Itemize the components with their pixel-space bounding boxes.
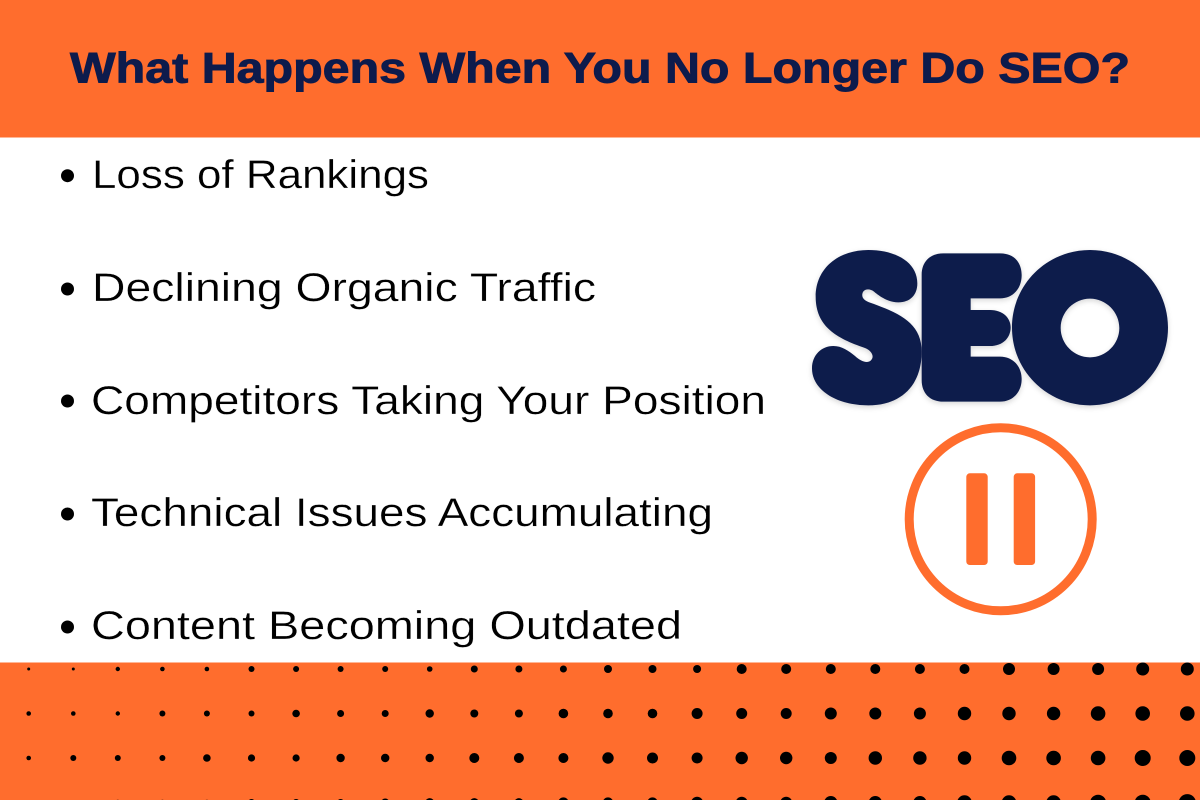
list item: technical issues accumulating: Technical Issues Accumulating (91, 491, 713, 535)
footer band with halftone dots (0, 662, 1200, 800)
header band with title (0, 0, 1200, 138)
list item: content becoming outdated: Content Becoming Outdated (91, 604, 682, 648)
icon: SEO bubble logo (812, 250, 1168, 405)
list item: loss of rankings: Loss of Rankings (92, 153, 429, 197)
list item: declining organic traffic: Declining Organic Traffic (92, 266, 596, 310)
icon: pause button (909, 428, 1092, 611)
list item: competitors taking your position: Competitors Taking Your Position (91, 379, 766, 423)
bullet list (61, 153, 766, 648)
title: What Happens When You No Longer Do SEO? (70, 44, 1130, 92)
halftone dot pattern (26, 662, 1196, 800)
